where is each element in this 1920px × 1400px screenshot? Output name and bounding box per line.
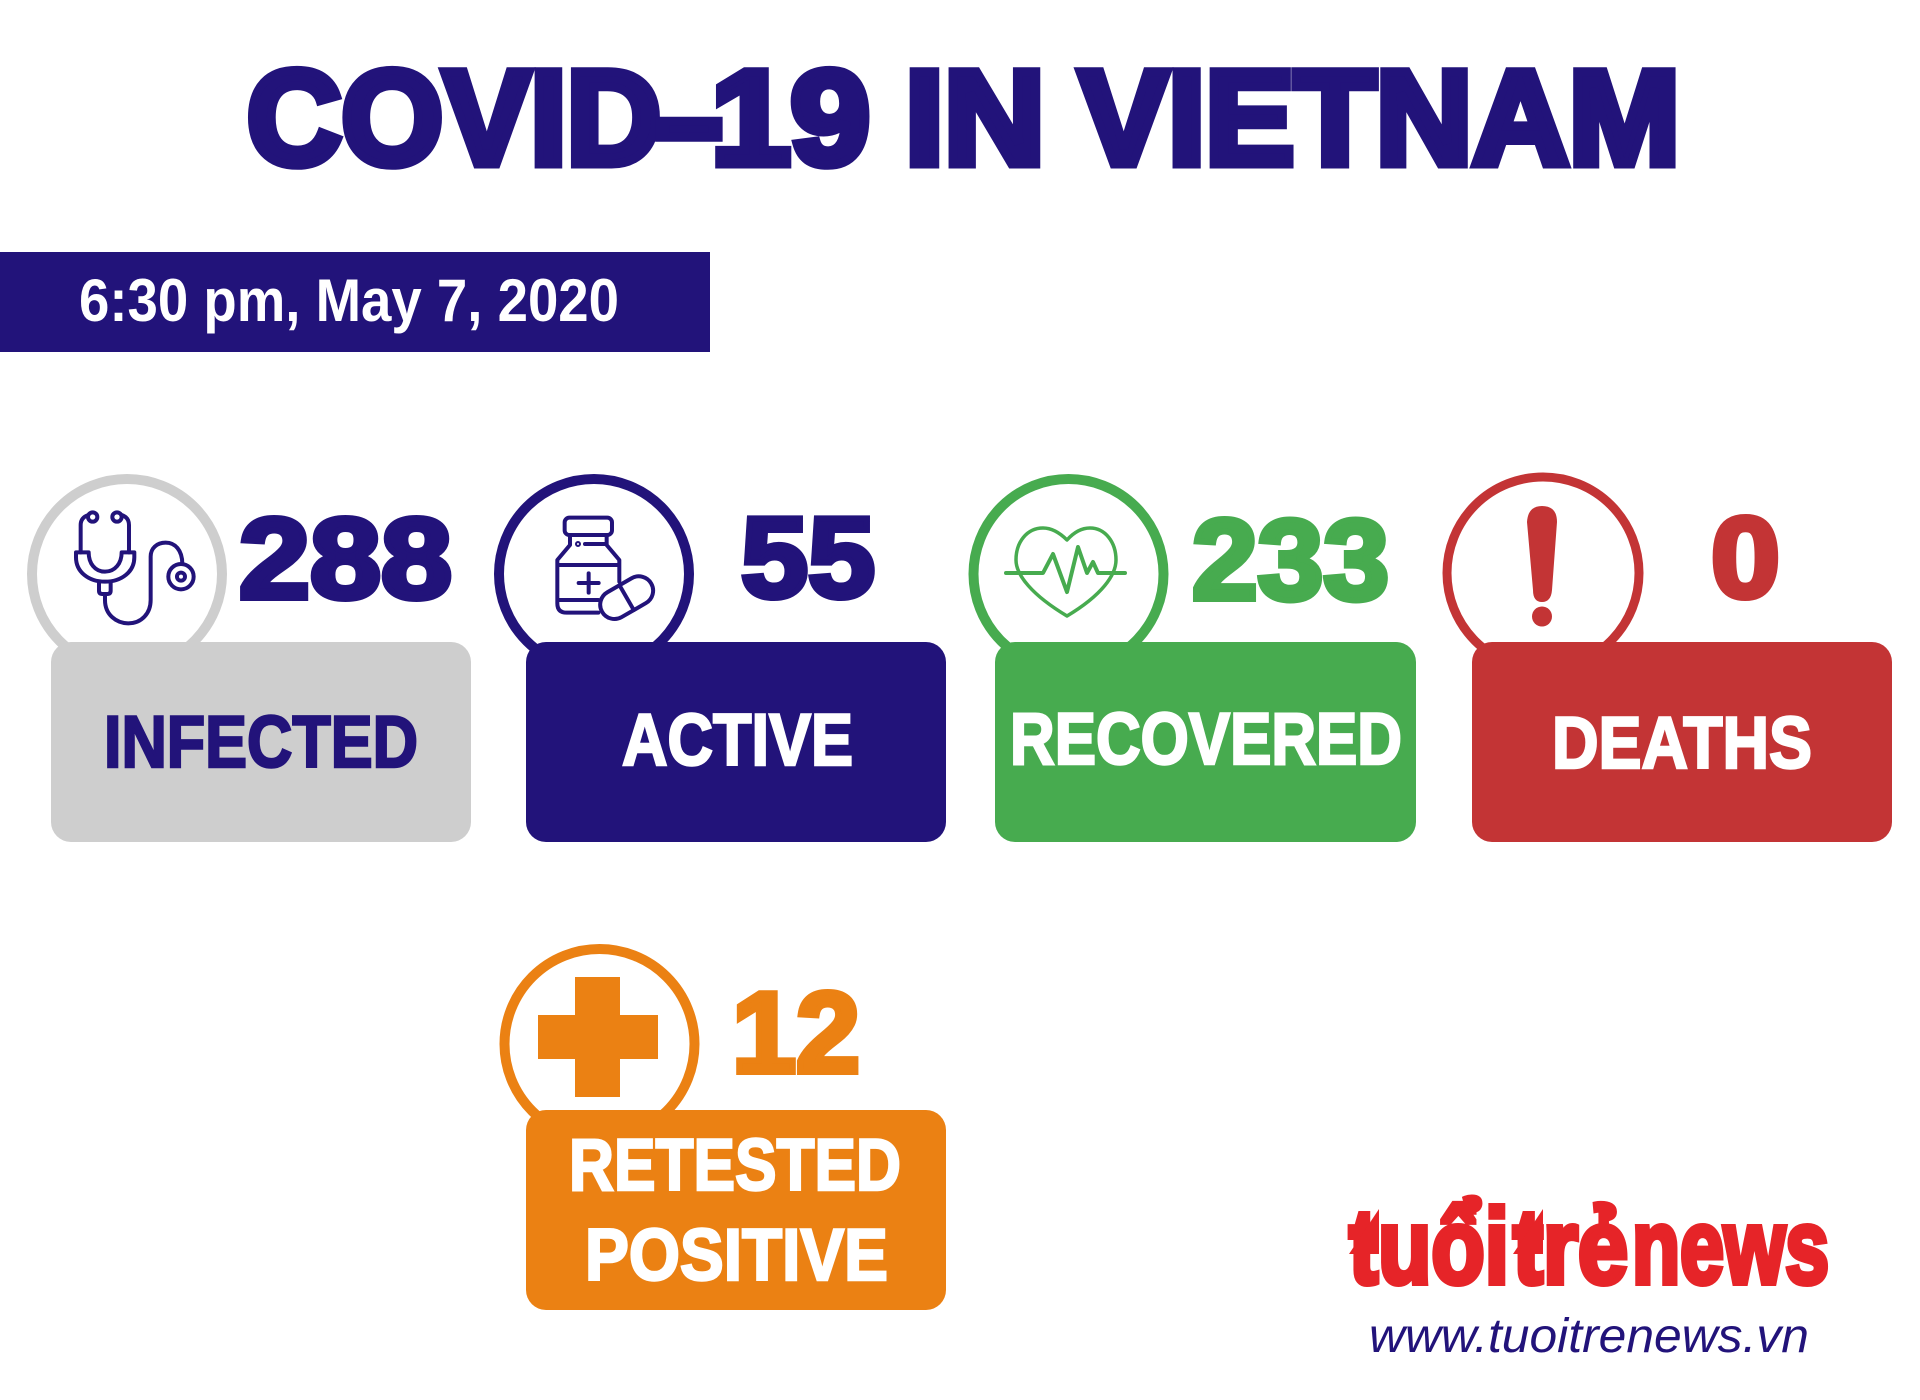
title: IN	[905, 44, 1045, 193]
label box: active	[526, 642, 946, 842]
logo: tuoi tre news: tuổi	[1349, 1188, 1509, 1306]
panel: retested positive	[504, 949, 946, 1310]
label box: retested positive: POSITIVE	[585, 1215, 888, 1296]
label box: deaths: DEATHS	[1552, 703, 1812, 784]
website url: www.tuoitrenews.vn	[1369, 1310, 1809, 1363]
label box: recovered	[995, 642, 1416, 842]
number: 0: 0	[1711, 495, 1780, 622]
title: 19	[711, 44, 870, 193]
logo: tuoi tre news	[1349, 1188, 1829, 1306]
label box: retested positive: RETESTED	[569, 1125, 901, 1206]
logo: tuoi tre news: news	[1632, 1188, 1829, 1306]
number: 12: 12	[732, 970, 860, 1097]
number: 55: 55	[741, 495, 875, 622]
icon: exclamation mark in circle	[1447, 477, 1639, 669]
number: 233: 233	[1192, 497, 1389, 624]
title: VIETNAM	[1079, 44, 1680, 193]
label box: recovered: RECOVERED	[1010, 699, 1402, 780]
label box: retested positive	[526, 1110, 946, 1310]
title	[247, 44, 1680, 193]
icon: cross in circle	[504, 949, 694, 1139]
icon: medicine bottle and pill in circle	[499, 479, 689, 669]
title: -	[654, 44, 724, 193]
label box: infected	[51, 642, 471, 842]
title: COVID	[247, 44, 661, 193]
panel: deaths	[1447, 477, 1892, 842]
icon: stethoscope in circle	[32, 479, 222, 669]
icon: heart with pulse in circle	[974, 479, 1164, 669]
panel: active	[499, 479, 946, 842]
label box: deaths	[1472, 642, 1892, 842]
logo: tuoi tre news: trẻ	[1513, 1188, 1628, 1306]
date banner	[0, 252, 710, 352]
number: 288: 288	[239, 496, 452, 623]
date banner: 6:30 pm, May 7, 2020	[79, 267, 619, 334]
label box: active: ACTIVE	[622, 700, 853, 781]
panel: recovered	[974, 479, 1416, 842]
panel: infected	[32, 479, 471, 842]
label box: infected: INFECTED	[104, 702, 418, 783]
